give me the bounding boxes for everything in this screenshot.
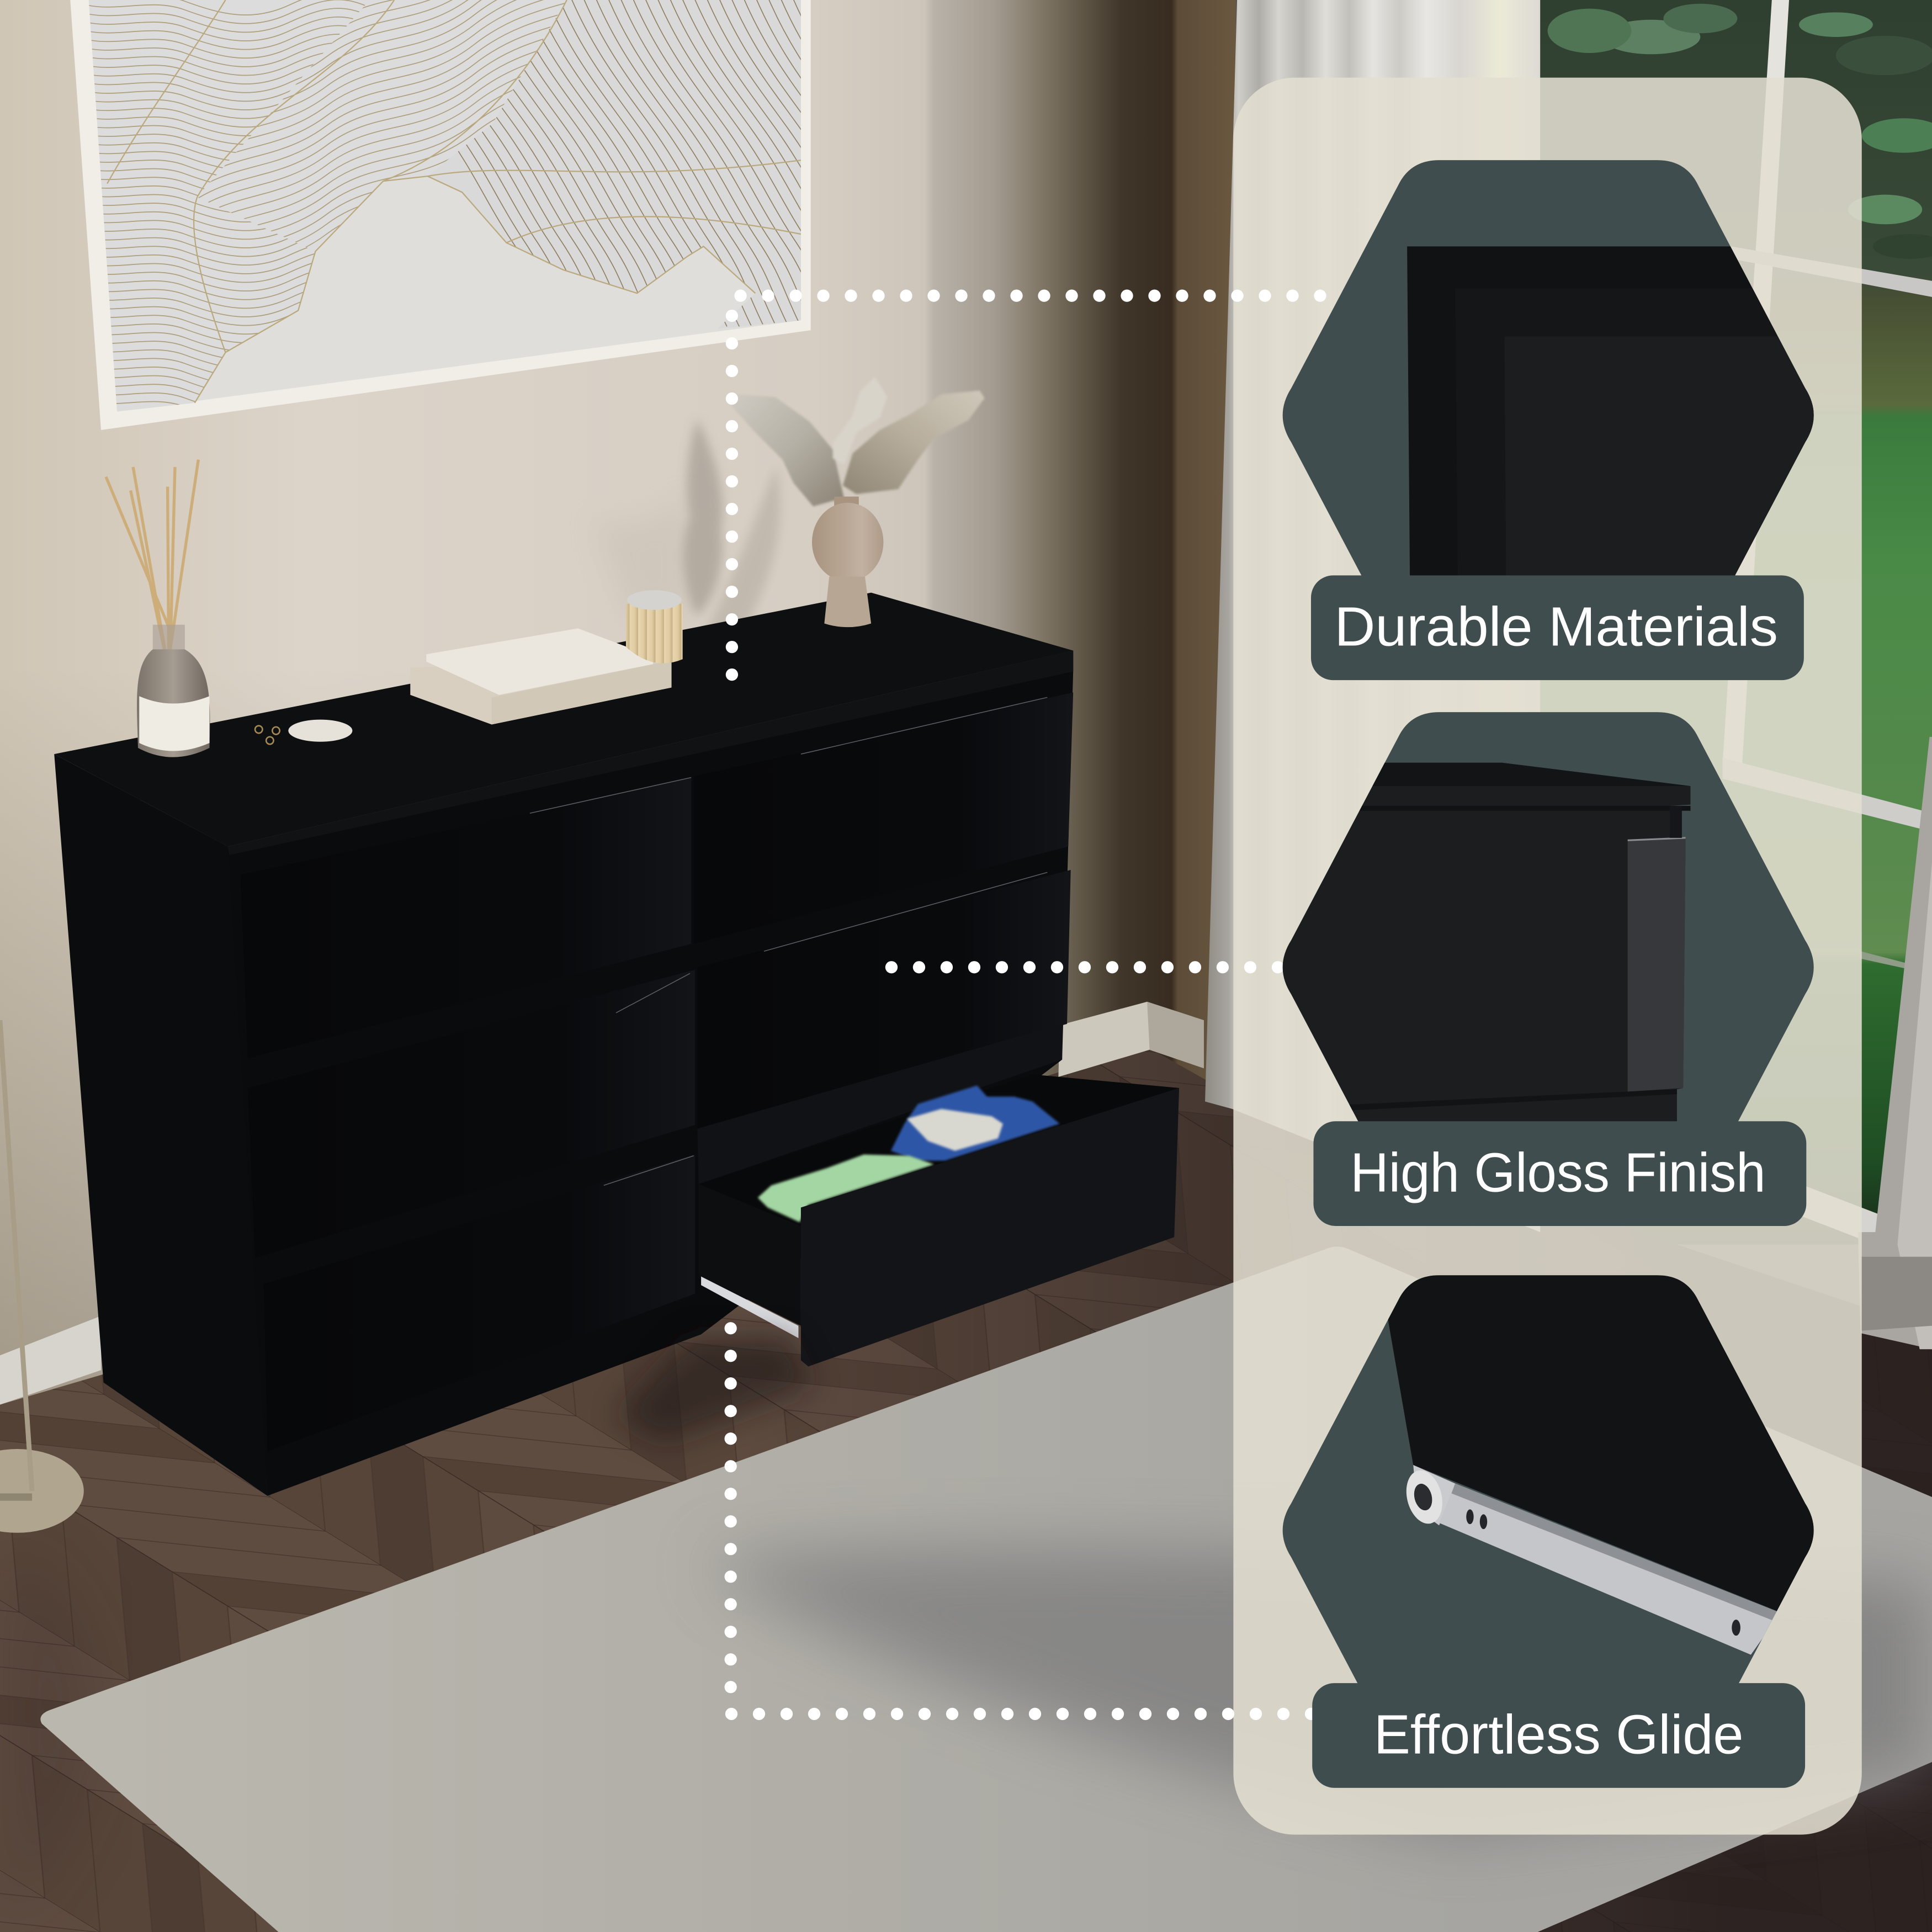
curtain right [1858,737,1932,1349]
vase with pampas [732,377,984,627]
drawer: bottom left [264,1155,695,1451]
dotted connector: materials [732,296,1320,675]
vase body [812,503,883,582]
feature panel [1233,78,1862,1835]
rug [40,1246,1932,1932]
ring dish and rings [255,720,352,744]
label: durable materials [1311,575,1804,680]
side panel [54,754,267,1496]
floor shadow [616,1337,813,1442]
frame [70,0,811,430]
hexagon: effortless glide [1283,1275,1814,1684]
front carcass [228,651,1073,1496]
contour lines middle [198,0,565,248]
top surface [54,593,1073,846]
open drawer side [699,1184,801,1326]
vase stand [824,577,871,627]
label: high gloss finish [1313,1121,1806,1226]
window with garden view [1528,0,1932,1267]
open drawer front [801,1088,1179,1366]
floor lamp [0,1020,84,1533]
contour lines left [89,0,365,412]
carcass band above open drawer [697,1024,1062,1184]
canvas [89,0,801,412]
clothes: blue [891,1086,1060,1161]
reed diffuser [106,460,210,757]
clothes: green [758,1155,934,1222]
dotted connector: gloss [891,964,1306,970]
baseboards [0,1002,1204,1405]
wall background [0,0,1236,1479]
clothes: white [907,1109,1003,1151]
hexagon: durable materials [1283,160,1814,575]
plant shadow on wall [591,419,780,665]
gold ridge lines [107,0,801,403]
label: effortless glide [1312,1683,1805,1788]
books [410,628,672,724]
curtain left [1205,0,1540,1232]
hexagon: high gloss finish [1283,712,1814,1122]
dresser [54,593,1179,1496]
drawer rail [701,1276,798,1338]
wall art [70,0,811,430]
drawer: top left [240,777,691,1058]
vase neck [834,497,859,511]
floor: herringbone parquet [0,1050,1932,1932]
drawer edge highlights [530,697,1047,1185]
label: high gloss finish: High Gloss Finish [1350,1142,1766,1203]
drawer: middle left [248,970,695,1258]
label: effortless glide: Effortless Glide [1374,1703,1743,1765]
label: durable materials: Durable Materials [1334,596,1778,658]
contour lines right [446,0,801,327]
drawer: top right [694,692,1073,944]
ribbed candle [626,590,683,664]
dotted connector: glide [731,1328,1311,1714]
pampas plumes [732,377,984,506]
drawer: middle right [697,870,1071,1129]
open drawer interior [699,1074,1179,1226]
